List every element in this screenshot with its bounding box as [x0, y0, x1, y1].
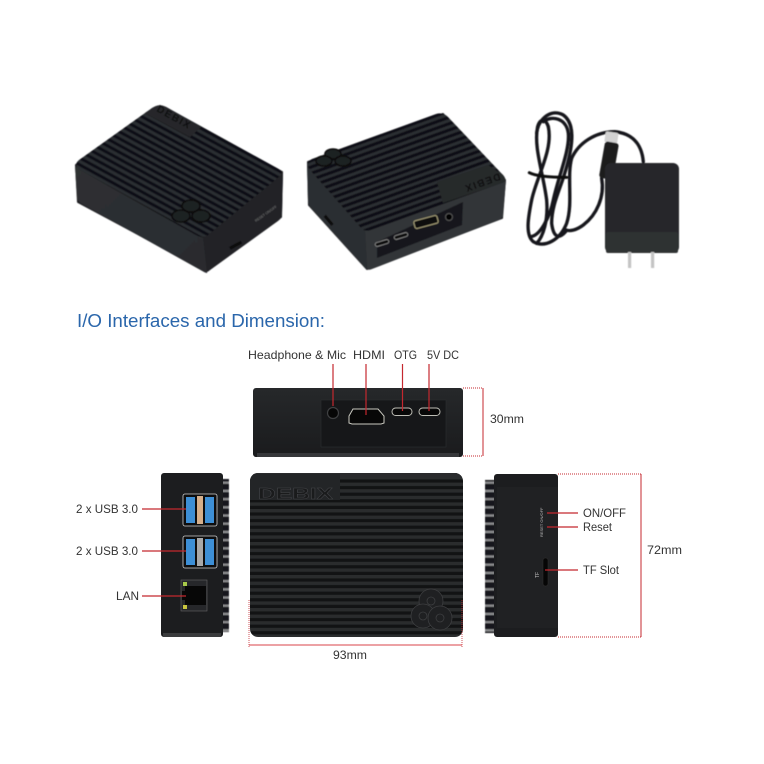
callout lines: front ports [333, 364, 429, 415]
label: LAN: LAN [116, 589, 139, 603]
icon: OTG port [392, 408, 412, 416]
callout lines: left ports [142, 509, 186, 596]
label: Reset: Reset [583, 520, 613, 534]
icon: TF slot [543, 558, 548, 586]
dimension: 30mm height [463, 388, 524, 456]
front view panel [253, 388, 463, 457]
label: OTG: OTG [394, 348, 417, 362]
right view panel [485, 474, 558, 637]
silk text: TF: TF [535, 572, 541, 578]
dimension: 93mm width [249, 600, 462, 662]
product photo: DEBIX box, port side view [307, 113, 506, 270]
label: 2 x USB 3.0 upper: 2 x USB 3.0 [76, 502, 138, 516]
label: Headphone & Mic: Headphone & Mic [248, 348, 346, 362]
dimension: 93mm width: 93mm [333, 648, 367, 662]
icon: HDMI port [349, 409, 384, 424]
product photo: DEBIX box, top-side view: RESET ON/OFF [254, 205, 278, 223]
label: ON/OFF: ON/OFF [583, 506, 626, 520]
label: 2 x USB 3.0 lower: 2 x USB 3.0 [76, 544, 138, 558]
top view panel [250, 473, 463, 637]
product photo: DEBIX box, top-side view [75, 104, 283, 273]
product photo: DEBIX box, port side view: DEBIX [462, 170, 502, 194]
heading: I/O Interfaces and Dimension: [77, 310, 325, 331]
icon: USB ports lower [183, 536, 217, 568]
dimension: 30mm height: 30mm [490, 412, 524, 426]
icon: 5V DC port [419, 408, 440, 416]
silk text: RESET ON/OFF: RESET ON/OFF [539, 507, 544, 537]
product photo: DEBIX box, top-side view: DEBIX [155, 104, 193, 132]
icon: LAN port [181, 580, 207, 611]
icon: USB ports upper [183, 494, 217, 526]
icon: three circle logo [411, 589, 452, 630]
dimension: 72mm height: 72mm [647, 543, 682, 557]
DEBIX logo: DEBIX [258, 486, 333, 503]
label: HDMI: HDMI [353, 348, 385, 362]
label: TF Slot: TF Slot [583, 563, 620, 577]
product photo: USB-C power adapter and cable [528, 113, 679, 268]
callout lines: right controls [545, 513, 578, 570]
left view panel: USB and LAN [161, 473, 229, 637]
label: 5V DC: 5V DC [427, 348, 459, 362]
icon: headphone jack [328, 408, 338, 418]
dimension: 72mm height [558, 474, 682, 637]
